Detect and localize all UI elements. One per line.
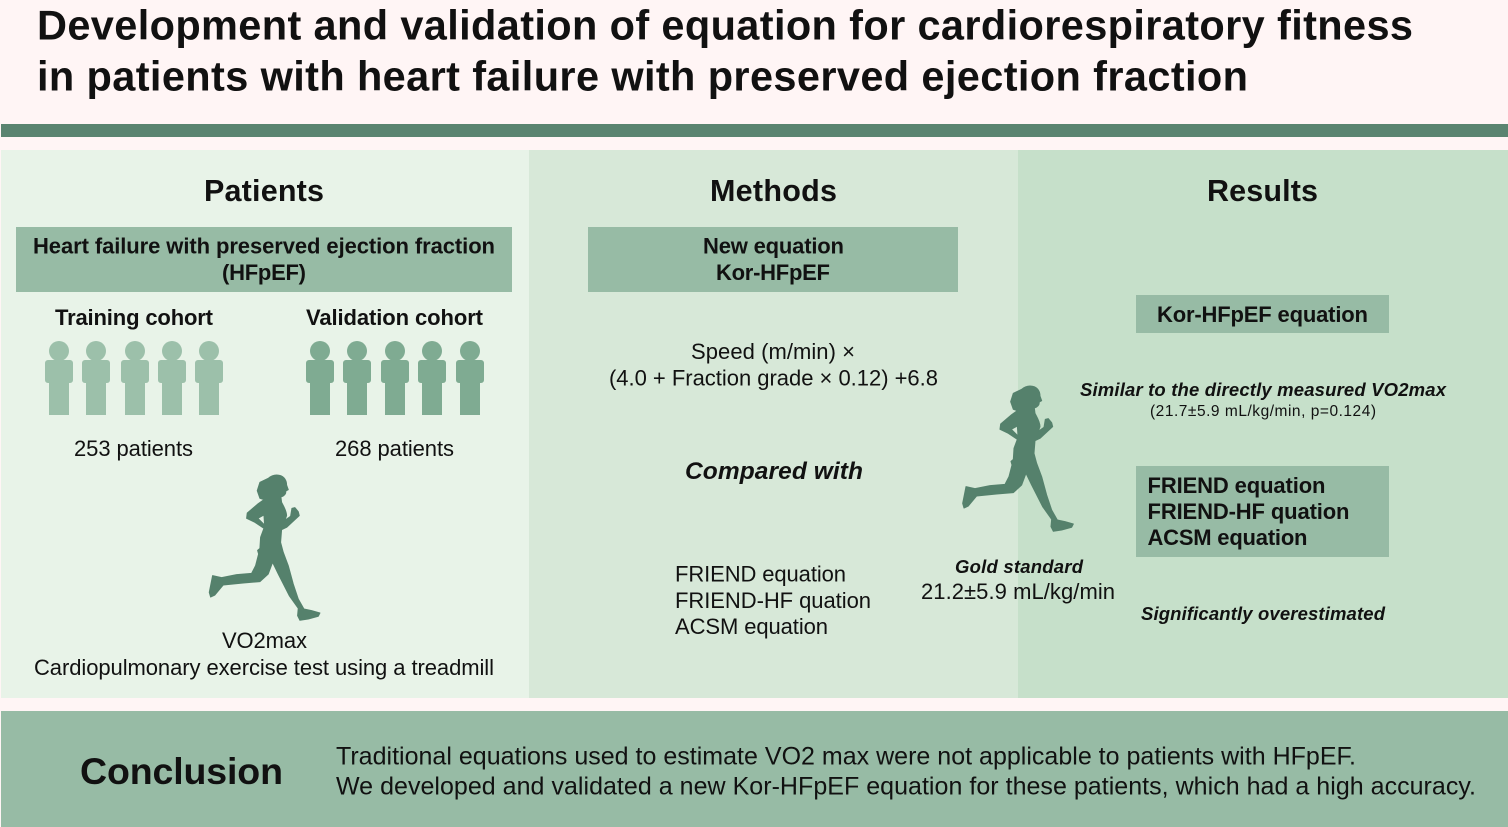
VO2max test text: Cardiopulmonary exercise test using a treadmill xyxy=(34,655,494,680)
heading: conclusion: Conclusion xyxy=(80,750,283,792)
gold standard: Gold standard xyxy=(955,556,1084,577)
HFpEF banner: (HFpEF) xyxy=(222,260,306,285)
Kor-HFpEF result: (21.7±5.9 mL/kg/min, p=0.124) xyxy=(1150,403,1376,420)
panel: patients xyxy=(1,150,529,698)
title: Development and validation of equation for cardiorespiratory fitness xyxy=(37,2,1413,49)
panel: conclusion xyxy=(1,711,1508,827)
equation formula xyxy=(609,339,938,390)
conclusion text: We developed and validated a new Kor-HFpEF equation for these patients, which had a high accuracy. xyxy=(336,773,1476,801)
Kor-HFpEF banner: Kor-HFpEF equation xyxy=(1157,302,1368,327)
Kor-HFpEF result xyxy=(1080,379,1447,420)
traditional equations result: Significantly overestimated xyxy=(1141,603,1386,624)
icon: training cohort people xyxy=(45,341,223,415)
icon: gold standard runner xyxy=(963,386,1073,531)
panel: results xyxy=(1018,150,1508,698)
equation formula: (4.0 + Fraction grade × 0.12) +6.8 xyxy=(609,366,938,390)
validation cohort: 268 patients xyxy=(335,436,454,461)
Kor-HFpEF result: Similar to the directly measured VO2max xyxy=(1080,379,1447,400)
icon: runner xyxy=(209,475,320,620)
traditional equations banner: FRIEND equation xyxy=(1148,473,1326,498)
title divider band xyxy=(1,124,1508,137)
new equation banner xyxy=(588,227,958,292)
comparison equations xyxy=(675,562,871,639)
Kor-HFpEF banner xyxy=(1136,295,1389,333)
conclusion text: Traditional equations used to estimate VO2 max were not applicable to patients with HFpEF. xyxy=(336,743,1356,771)
conclusion text xyxy=(336,743,1476,801)
validation cohort xyxy=(306,305,484,461)
traditional equations banner: ACSM equation xyxy=(1148,525,1308,550)
VO2max test text: VO2max xyxy=(222,628,307,653)
title: in patients with heart failure with preserved ejection fraction xyxy=(37,53,1248,100)
HFpEF banner xyxy=(16,227,512,292)
traditional equations banner xyxy=(1136,466,1389,557)
panel: methods xyxy=(529,150,1018,698)
training cohort: Training cohort xyxy=(55,305,214,330)
new equation banner: New equation xyxy=(703,234,844,258)
traditional equations banner: FRIEND-HF quation xyxy=(1148,499,1350,524)
HFpEF banner: Heart failure with preserved ejection fraction xyxy=(33,234,495,258)
comparison equations: FRIEND-HF quation xyxy=(675,588,871,613)
icon: validation cohort people xyxy=(306,341,484,415)
compared with: Compared with xyxy=(685,458,863,485)
heading: methods: Methods xyxy=(710,174,837,208)
validation cohort: Validation cohort xyxy=(306,305,484,330)
training cohort xyxy=(45,305,223,461)
comparison equations: FRIEND equation xyxy=(675,562,846,586)
gold standard xyxy=(921,556,1115,604)
comparison equations: ACSM equation xyxy=(675,614,828,639)
heading: patients: Patients xyxy=(204,174,324,208)
new equation banner: Kor-HFpEF xyxy=(716,260,830,285)
title xyxy=(37,2,1413,100)
VO2max test text xyxy=(34,628,494,680)
training cohort: 253 patients xyxy=(74,436,193,461)
gold standard: 21.2±5.9 mL/kg/min xyxy=(921,579,1115,604)
equation formula: Speed (m/min) × xyxy=(691,339,855,364)
heading: results: Results xyxy=(1207,174,1318,208)
